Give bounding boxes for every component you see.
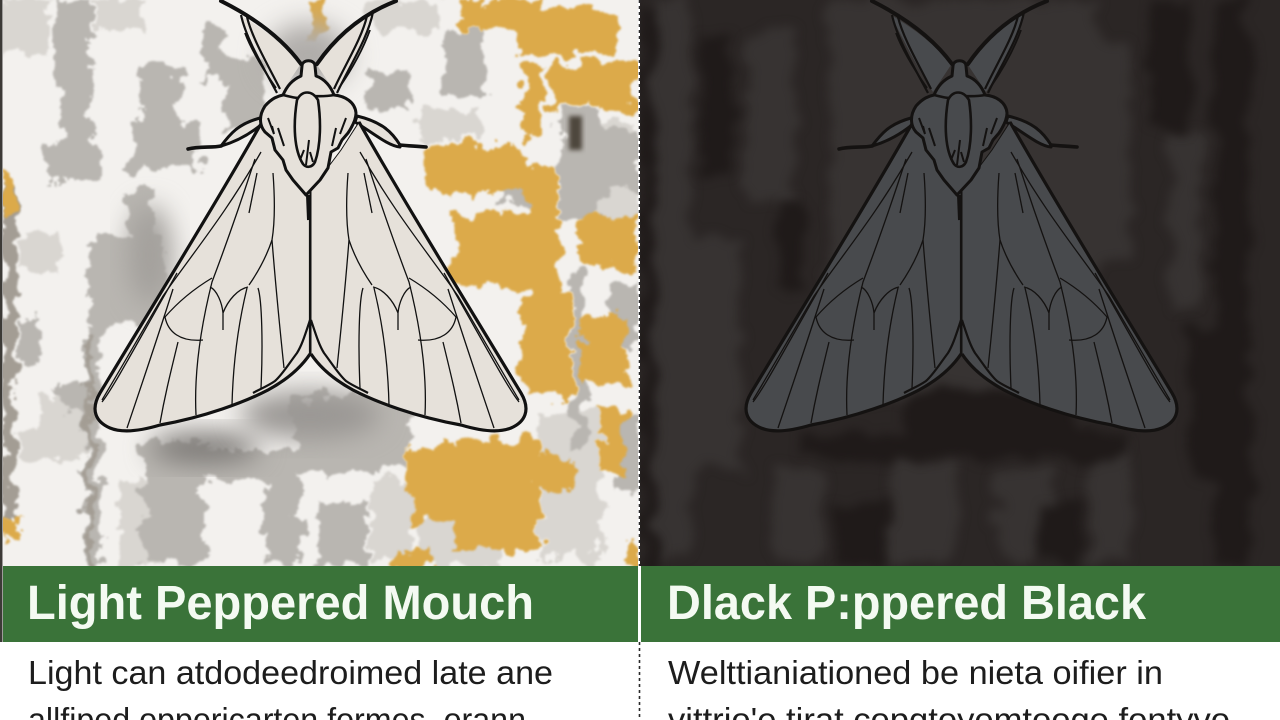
- text block: dark form description: [668, 654, 1230, 720]
- moth: light form: [95, 1, 526, 431]
- text block: dark form description: Welttianiationed be nieta oifier in: [668, 654, 1163, 691]
- moth: dark form: [746, 1, 1177, 431]
- panel: dark bark background: [640, 0, 1280, 566]
- heading: light form: Light Peppered Mouch: [27, 577, 534, 630]
- panel: light bark background: [0, 0, 640, 569]
- panel: dark form heading band: [641, 566, 1280, 642]
- text block: light form description: Light can atdodeedroimed late ane: [28, 654, 553, 691]
- panel: light form heading band: [3, 566, 638, 642]
- heading: dark form: Dlack P:ppered Black: [667, 577, 1146, 630]
- text block: light form description: [28, 654, 553, 720]
